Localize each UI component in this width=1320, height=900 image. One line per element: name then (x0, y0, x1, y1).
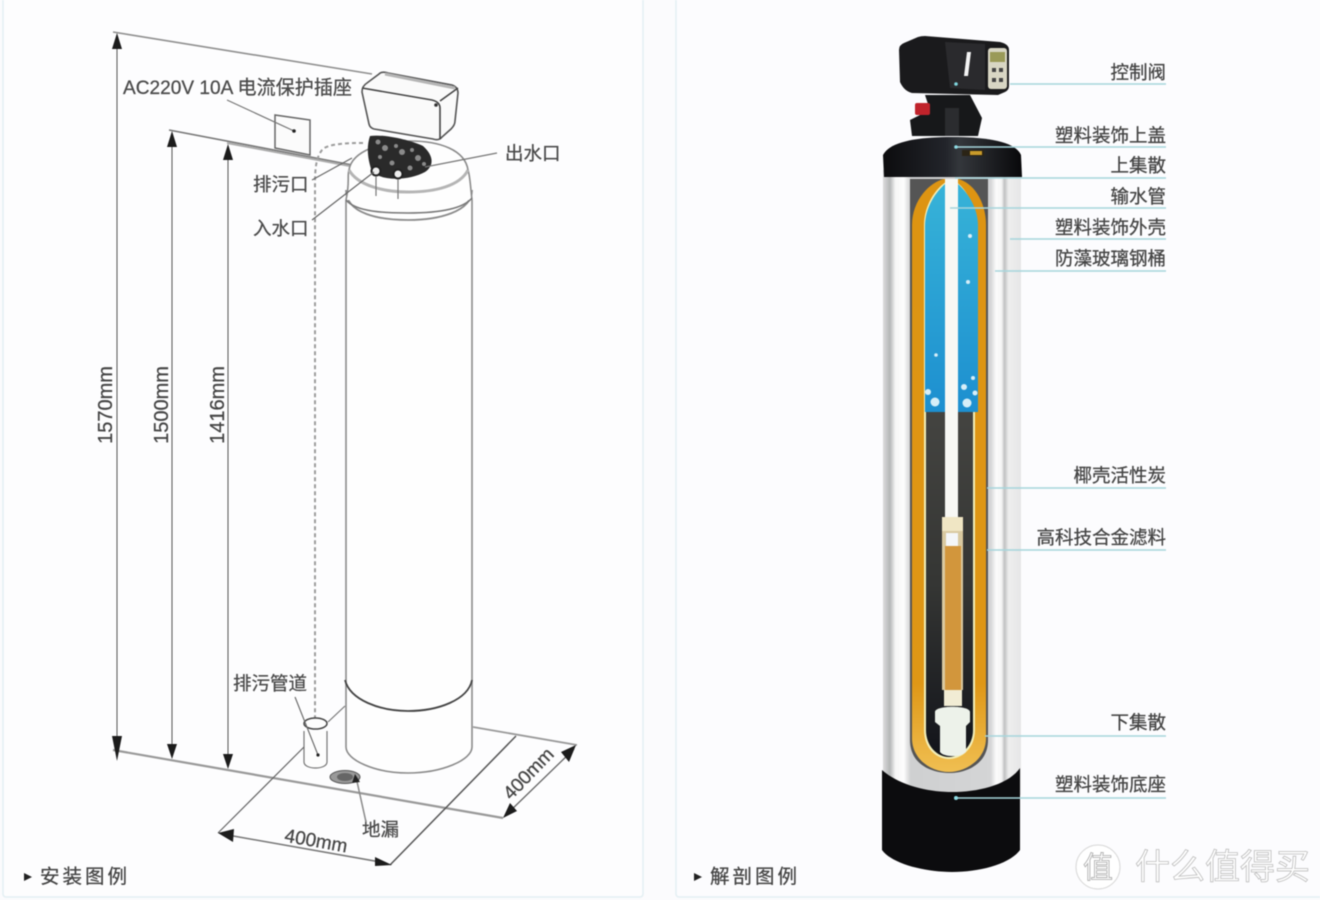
lower tube (944, 690, 962, 706)
dimension 1416mm: 1416mm (207, 366, 229, 444)
dimension width 400mm (218, 826, 392, 866)
label: water inlet: 入水口 (253, 218, 309, 239)
dimension width 400mm: 400mm (283, 826, 349, 857)
label: lower diffuser: 下集散 (1110, 712, 1166, 733)
dimension depth 400mm (499, 744, 576, 818)
label: fiberglass tank: 防藻玻璃钢桶 (1055, 248, 1166, 269)
floor area lines (218, 727, 577, 865)
label: socket: AC220V 10A 电流保护插座 (123, 77, 352, 99)
label: plastic outer shell: 塑料装饰外壳 (1055, 217, 1166, 238)
body shell (883, 170, 1021, 795)
dimension 1416mm (207, 144, 233, 769)
label: drain pipe (233, 673, 320, 757)
legend: installation: 安装图例 (40, 866, 130, 888)
watermark: 什么值得买 (1135, 848, 1310, 887)
control head (899, 36, 1009, 95)
lower diffuser (935, 707, 970, 756)
cutaway window (910, 179, 988, 773)
label: control valve: 控制阀 (1110, 62, 1166, 83)
tank line drawing (345, 141, 472, 773)
label: plastic base: 塑料装饰底座 (1055, 774, 1166, 795)
label: plastic base (954, 774, 1166, 800)
dimension 1570mm (95, 33, 122, 761)
label: drain outlet: 排污口 (253, 174, 309, 195)
orange insulation layer (912, 179, 986, 772)
base (882, 768, 1020, 872)
top cap (883, 137, 1022, 177)
water layer (925, 184, 978, 412)
valve neck (910, 95, 982, 136)
watermark (1076, 845, 1310, 889)
carbon media (926, 412, 973, 757)
label: floor drain (352, 774, 399, 840)
icon: power socket (227, 100, 310, 155)
label: water inlet (253, 172, 374, 239)
label: floor drain: 地漏 (362, 819, 399, 840)
central tube (945, 179, 958, 517)
label: water outlet (425, 143, 561, 167)
label: plastic top cover (954, 125, 1166, 149)
icon: floor drain (330, 770, 360, 784)
label: coconut shell activated carbon: 椰壳活性炭 (1073, 465, 1166, 486)
label: upper diffuser: 上集散 (1110, 155, 1166, 176)
label: plastic top cover: 塑料装饰上盖 (1055, 125, 1166, 146)
dimension depth 400mm: 400mm (499, 744, 559, 804)
label: alloy filter media: 高科技合金滤料 (1036, 527, 1166, 548)
drain hose dashed line (315, 143, 363, 718)
control valve line drawing (362, 72, 458, 199)
dimension 1500mm: 1500mm (151, 366, 173, 444)
label: water pipe: 输水管 (1110, 186, 1166, 207)
label: drain pipe: 排污管道 (233, 673, 307, 694)
label: water outlet: 出水口 (505, 143, 561, 164)
panel: installation diagram (3, 0, 643, 897)
filter cartridge (942, 517, 963, 690)
dimension reference lines (113, 32, 503, 818)
inner yellow liner (924, 182, 975, 759)
panel: anatomy diagram (676, 0, 1320, 897)
legend: anatomy: 解剖图例 (710, 866, 800, 888)
water bubbles (925, 234, 978, 408)
dimension 1570mm: 1570mm (95, 366, 117, 444)
label: drain outlet (253, 158, 352, 195)
drain pipe (304, 706, 345, 768)
watermark: 值 (1083, 852, 1113, 885)
dimension 1500mm (151, 131, 177, 759)
